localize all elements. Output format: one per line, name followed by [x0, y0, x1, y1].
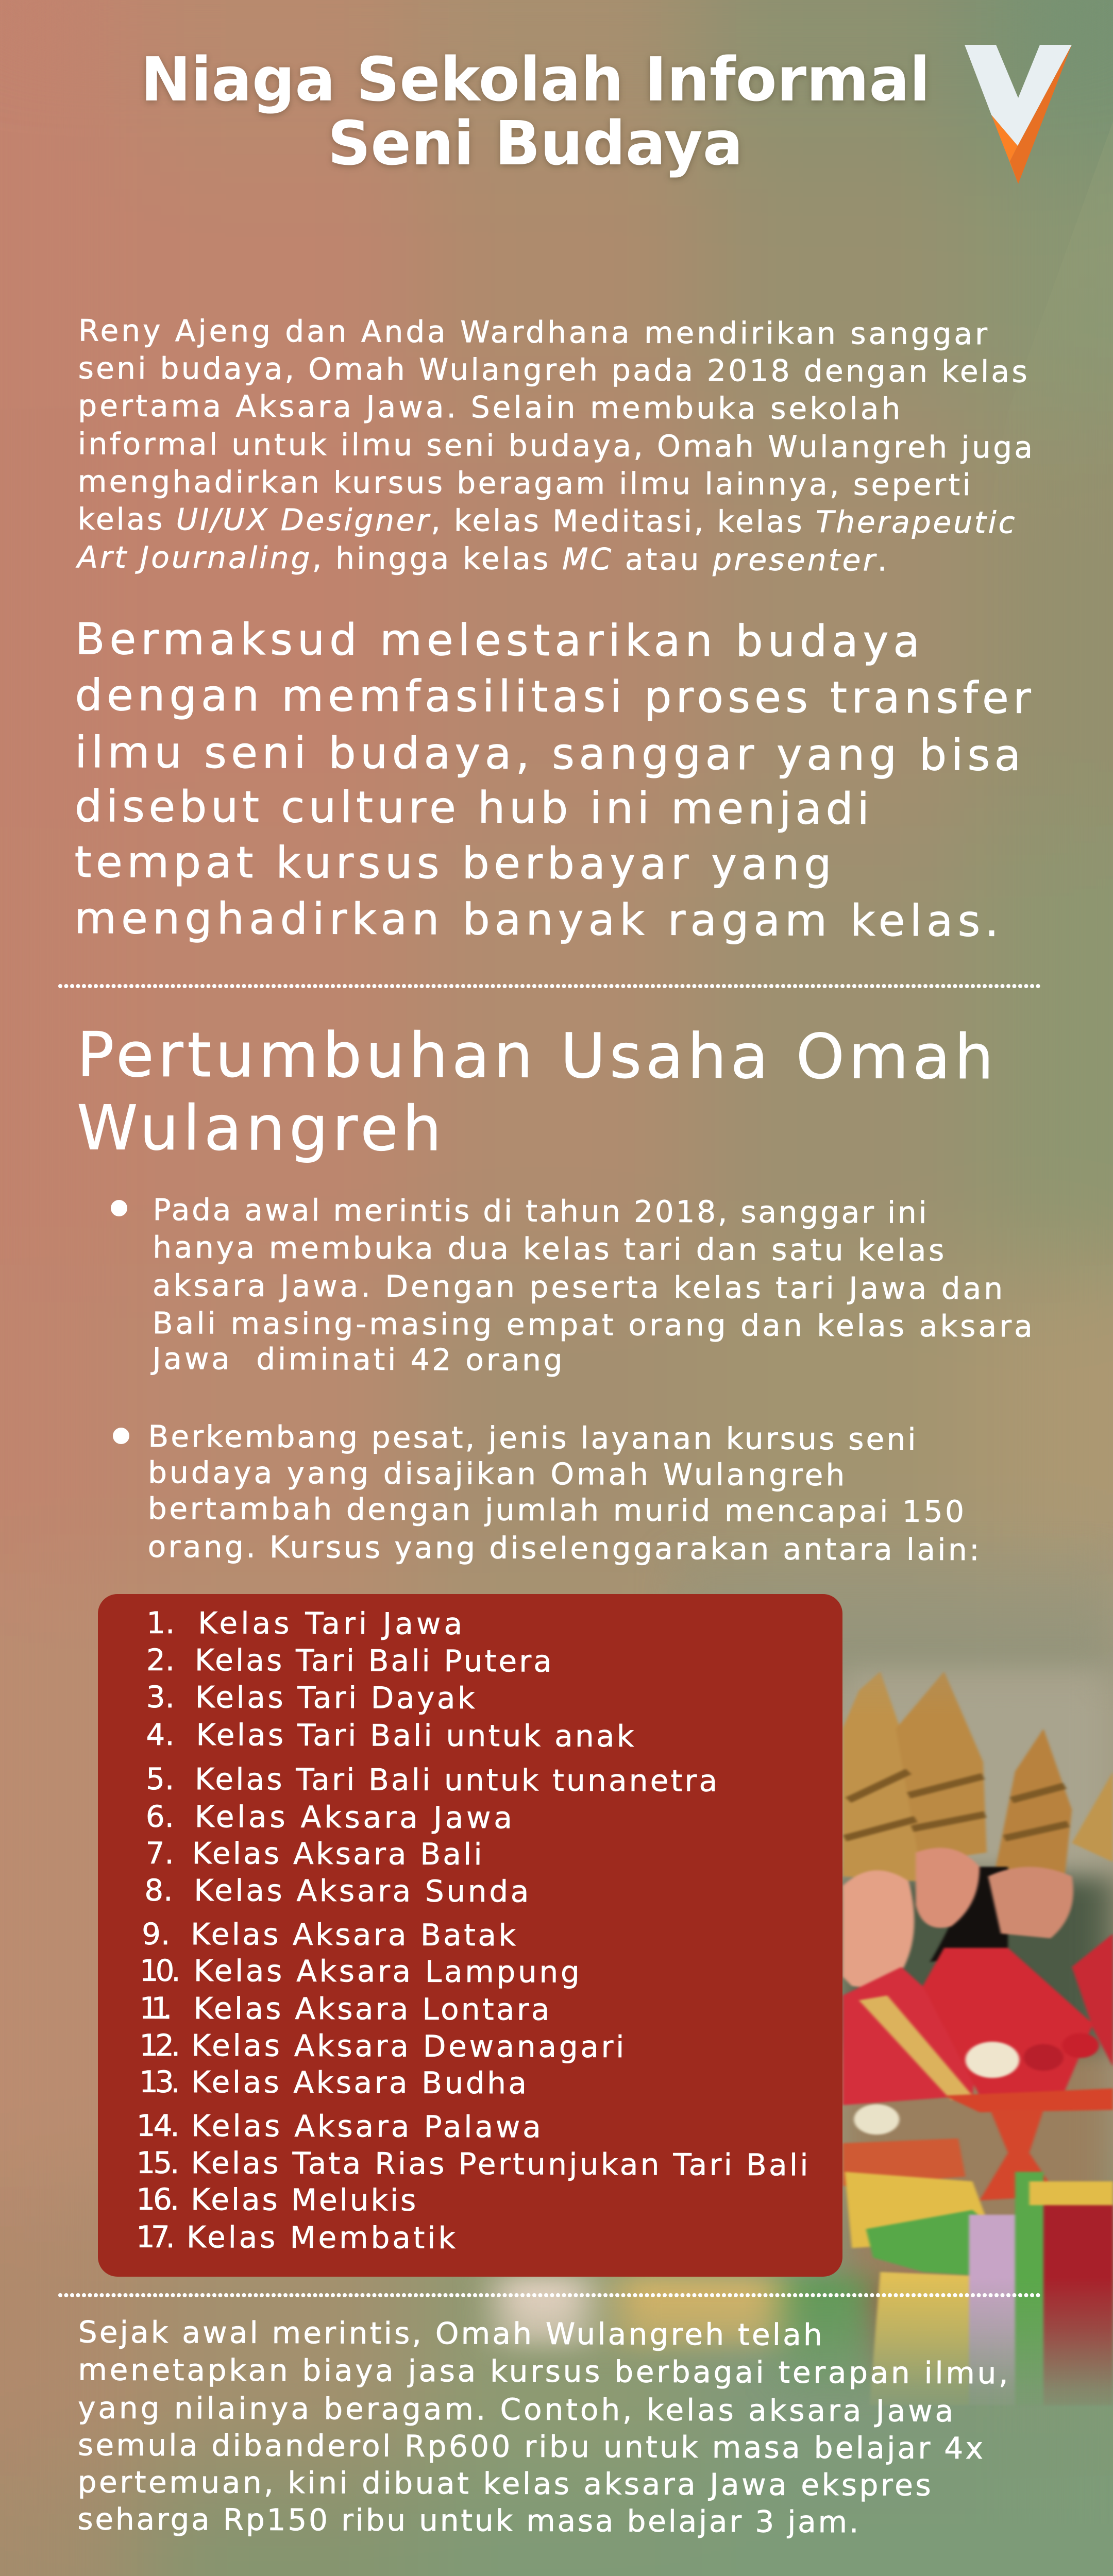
intro paragraph: informal untuk ilmu seni budaya, Omah Wulangreh juga: [78, 426, 1033, 465]
panel: list of classes: 1.: [146, 1605, 175, 1640]
bullet: early years: Pada awal merintis di tahun 2018, sanggar ini: [153, 1192, 927, 1230]
bullet: rapid growth: bertambah dengan jumlah murid mencapai 150: [148, 1491, 964, 1529]
bullet: early years: hanya membuka dua kelas tari dan satu kelas: [153, 1230, 944, 1268]
panel: list of classes: Kelas Aksara Lontara: [193, 1991, 550, 2027]
panel: list of classes: 12.: [139, 2028, 180, 2063]
pricing paragraph: Sejak awal merintis, Omah Wulangreh telah: [78, 2314, 822, 2352]
pricing paragraph: semula dibanderol Rp600 ribu untuk masa belajar 4x: [78, 2427, 983, 2466]
panel: list of classes: Kelas Aksara Sunda: [194, 1873, 529, 1909]
panel: list of classes: 5.: [146, 1761, 175, 1797]
panel: list of classes: 3.: [146, 1680, 175, 1715]
intro paragraph: [75, 313, 1033, 579]
callout paragraph: ilmu seni budaya, sanggar yang bisa: [75, 727, 1021, 781]
panel: list of classes: Kelas Tari Jawa: [198, 1605, 462, 1641]
panel: list of classes: 6.: [146, 1799, 174, 1834]
panel: list of classes: 13.: [139, 2064, 180, 2099]
panel: list of classes: [98, 1594, 842, 2277]
panel: list of classes: Kelas Aksara Lampung: [194, 1953, 580, 1990]
panel: list of classes: Kelas Aksara Dewanagari: [191, 2028, 624, 2064]
bullet: early years: [111, 1192, 1033, 1380]
pricing paragraph: seharga Rp150 ribu untuk masa belajar 3 jam.: [77, 2501, 859, 2539]
icon: Validnews V logo: [965, 45, 1072, 184]
panel: list of classes: 9.: [142, 1917, 171, 1952]
panel: list of classes: 17.: [136, 2219, 175, 2255]
callout paragraph: tempat kursus berbayar yang: [74, 837, 832, 890]
callout paragraph: dengan memfasilitasi proses transfer: [75, 670, 1031, 723]
panel: list of classes: Kelas Tari Dayak: [195, 1680, 475, 1716]
panel: list of classes: 8.: [144, 1873, 173, 1908]
panel: list of classes: Kelas Aksara Bali: [192, 1836, 482, 1872]
panel: list of classes: 11.: [139, 1991, 173, 2026]
panel: list of classes: Kelas Aksara Palawa: [191, 2108, 541, 2145]
panel: list of classes: Kelas Tari Bali untuk tunanetra: [195, 1761, 717, 1799]
panel: list of classes: Kelas Tari Bali Putera: [195, 1642, 552, 1679]
photo: batik class seen from above: [0, 2575, 1113, 2576]
panel: list of classes: 4.: [146, 1717, 175, 1752]
title: [141, 44, 930, 179]
photo: Balinese dancers: [497, 1529, 1113, 2405]
panel: list of classes: Kelas Aksara Budha: [191, 2064, 527, 2100]
panel: list of classes: 2.: [146, 1642, 175, 1677]
title: Seni Budaya: [328, 108, 743, 179]
panel: list of classes: Kelas Melukis: [191, 2182, 416, 2218]
panel: list of classes: 15.: [136, 2145, 180, 2180]
pricing paragraph: pertemuan, kini dibuat kelas aksara Jawa ekspres: [78, 2464, 931, 2503]
callout paragraph: menghadirkan banyak ragam kelas.: [74, 893, 999, 946]
section heading: [77, 1020, 993, 1166]
intro paragraph: menghadirkan kursus beragam ilmu lainnya, seperti: [78, 464, 971, 502]
bullet: rapid growth: budaya yang disajikan Omah Wulangreh: [148, 1455, 845, 1493]
pricing paragraph: menetapkan biaya jasa kursus berbagai terapan ilmu,: [78, 2352, 1008, 2391]
intro paragraph: pertama Aksara Jawa. Selain membuka sekolah: [78, 388, 900, 427]
bullet: rapid growth: orang. Kursus yang diselenggarakan antara lain:: [148, 1529, 980, 1567]
bullet: rapid growth: Berkembang pesat, jenis layanan kursus seni: [148, 1419, 916, 1457]
intro paragraph: Reny Ajeng dan Anda Wardhana mendirikan sanggar: [78, 313, 987, 351]
intro paragraph: Art Journaling, hingga kelas MC atau presenter.: [75, 539, 887, 578]
bullet: rapid growth: [113, 1419, 980, 1567]
bullet: early years: aksara Jawa. Dengan peserta kelas tari Jawa dan: [153, 1268, 1003, 1306]
bullet: early years: Jawa diminati 42 orang: [150, 1341, 563, 1378]
panel: list of classes: Kelas Aksara Jawa: [195, 1799, 512, 1835]
callout paragraph: [74, 614, 1032, 946]
section heading: Wulangreh: [77, 1093, 442, 1165]
pricing paragraph: yang nilainya beragam. Contoh, kelas aksara Jawa: [78, 2390, 953, 2429]
panel: list of classes: 10.: [140, 1953, 181, 1988]
intro paragraph: kelas UI/UX Designer, kelas Meditasi, kelas Therapeutic: [77, 501, 1015, 540]
panel: list of classes: Kelas Membatik: [187, 2219, 456, 2256]
panel: list of classes: 16.: [136, 2182, 179, 2217]
section heading: Pertumbuhan Usaha Omah: [77, 1020, 993, 1093]
intro paragraph: seni budaya, Omah Wulangreh pada 2018 dengan kelas: [78, 350, 1027, 389]
panel: list of classes: Kelas Aksara Batak: [191, 1917, 516, 1953]
title: Niaga Sekolah Informal: [141, 44, 930, 115]
panel: list of classes: 14.: [137, 2108, 180, 2143]
bullet: early years: Bali masing-masing empat orang dan kelas aksara: [153, 1306, 1033, 1344]
grass ground: [0, 2575, 1113, 2576]
callout paragraph: Bermaksud melestarikan budaya: [75, 614, 920, 667]
pricing paragraph: [77, 2314, 1008, 2540]
panel: list of classes: 7.: [145, 1836, 174, 1871]
panel: list of classes: Kelas Tari Bali untuk anak: [196, 1717, 634, 1754]
panel: list of classes: Kelas Tata Rias Pertunjukan Tari Bali: [191, 2145, 808, 2182]
callout paragraph: disebut culture hub ini menjadi: [75, 781, 869, 834]
